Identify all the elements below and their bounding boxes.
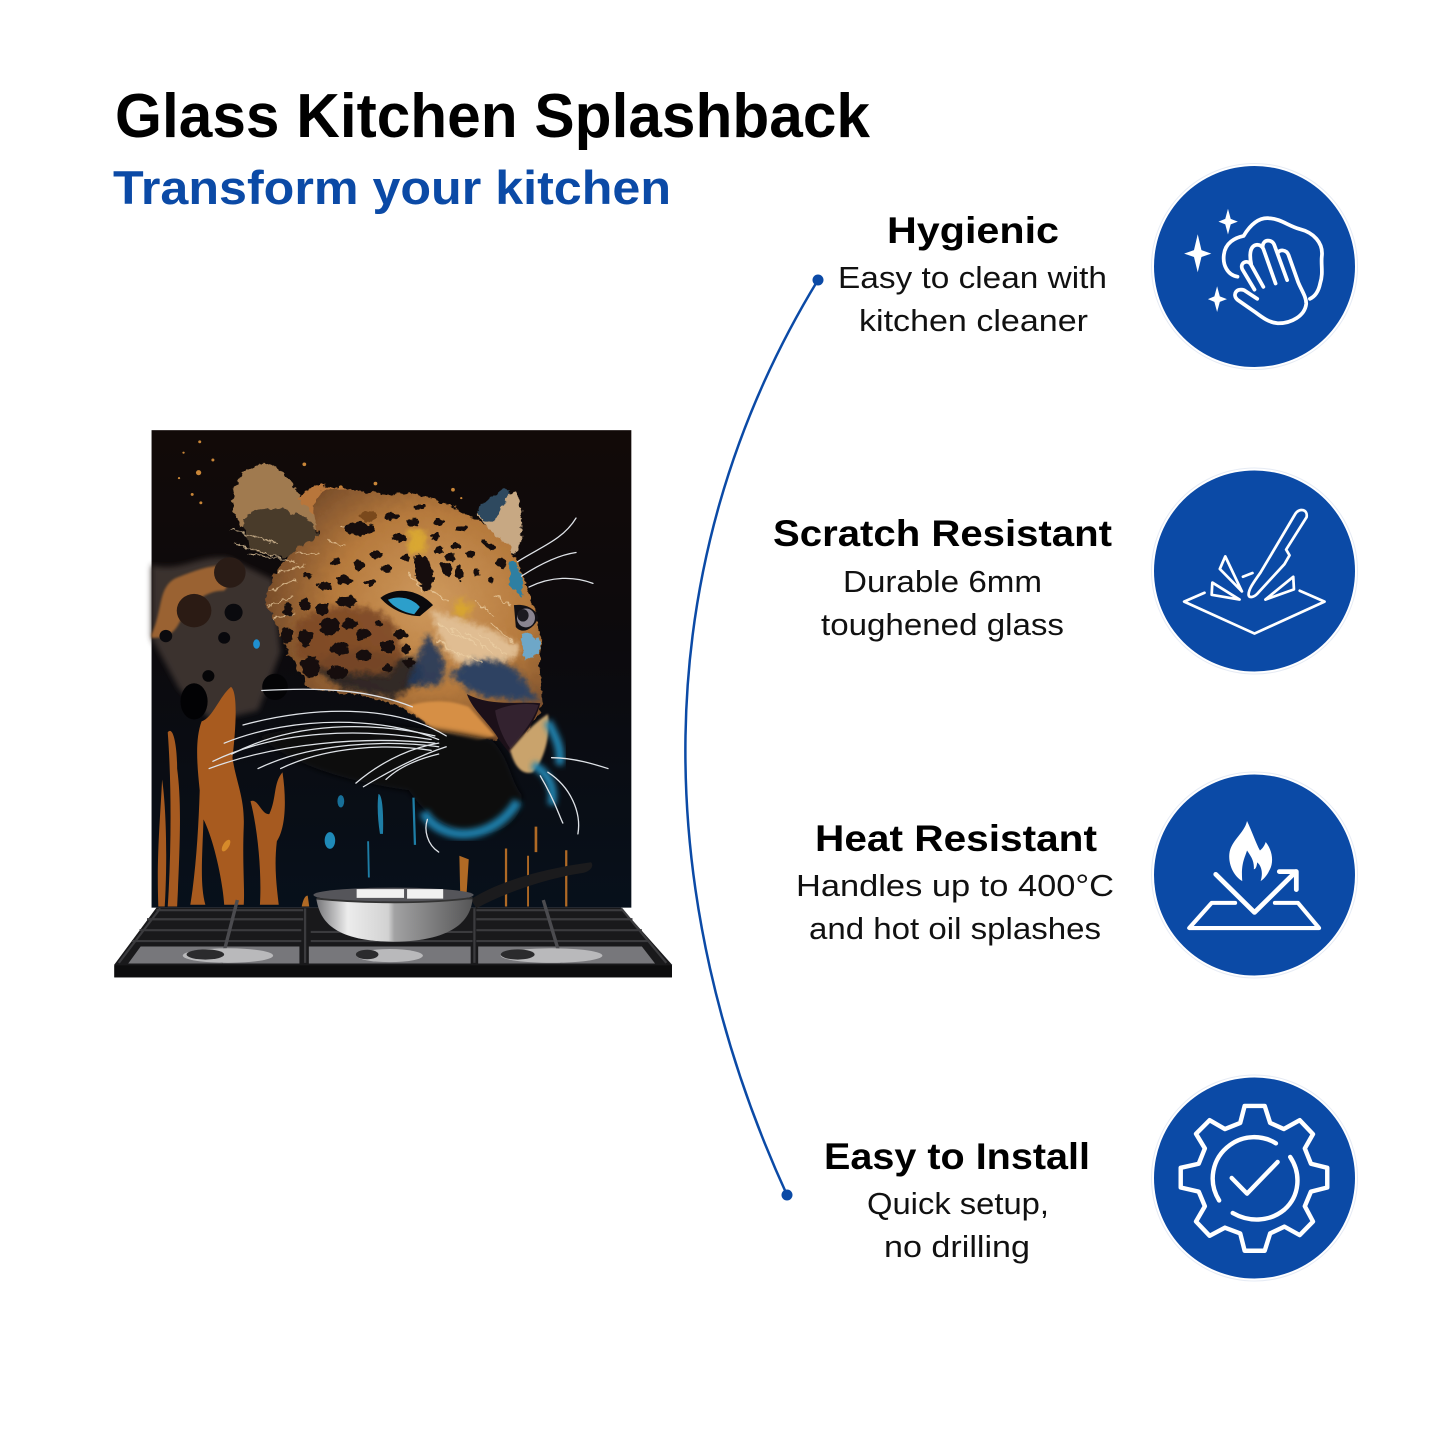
product image: leopard splashback above gas hob — [114, 430, 672, 977]
connector curve with end dots — [685, 274, 824, 1200]
icon: flame over heat-reflecting surface — [1152, 772, 1358, 978]
feature text: scratch resistant: Scratch Resistant — [773, 513, 1112, 554]
feature text: heat resistant: and hot oil splashes — [809, 911, 1101, 946]
feature text: hygienic — [838, 210, 1107, 338]
feature text: easy to install: Easy to Install — [824, 1136, 1090, 1177]
icon: hand wiping with sparkles — [1152, 164, 1358, 370]
feature text: scratch resistant: toughened glass — [821, 607, 1064, 642]
feature text: heat resistant — [796, 818, 1114, 946]
fur strokes — [232, 525, 514, 663]
feature text: easy to install — [824, 1136, 1090, 1264]
feature text: hygienic: kitchen cleaner — [859, 303, 1088, 338]
feature text: heat resistant: Handles up to 400°C — [796, 868, 1114, 903]
feature text: scratch resistant: Durable 6mm — [843, 564, 1042, 599]
feature text: heat resistant: Heat Resistant — [815, 818, 1097, 859]
spots — [281, 505, 506, 679]
feature text: hygienic: Hygienic — [887, 210, 1059, 251]
feature text: scratch resistant — [773, 513, 1112, 642]
title: Glass Kitchen Splashback — [115, 82, 870, 151]
gas hob — [114, 900, 672, 977]
subtitle: Transform your kitchen — [113, 161, 671, 214]
whiskers — [209, 518, 608, 852]
icon: knife scratching glass surface — [1152, 468, 1358, 674]
paint drips — [158, 687, 567, 907]
splashback panel — [152, 430, 631, 908]
eyes and muzzle — [258, 591, 560, 834]
feature text: easy to install: no drilling — [884, 1229, 1030, 1264]
feature text: hygienic: Easy to clean with — [838, 260, 1107, 295]
feature text: easy to install: Quick setup, — [867, 1186, 1049, 1221]
leopard head — [232, 463, 542, 740]
icon: gear with checkmark — [1152, 1075, 1358, 1281]
frying pan — [313, 862, 592, 942]
